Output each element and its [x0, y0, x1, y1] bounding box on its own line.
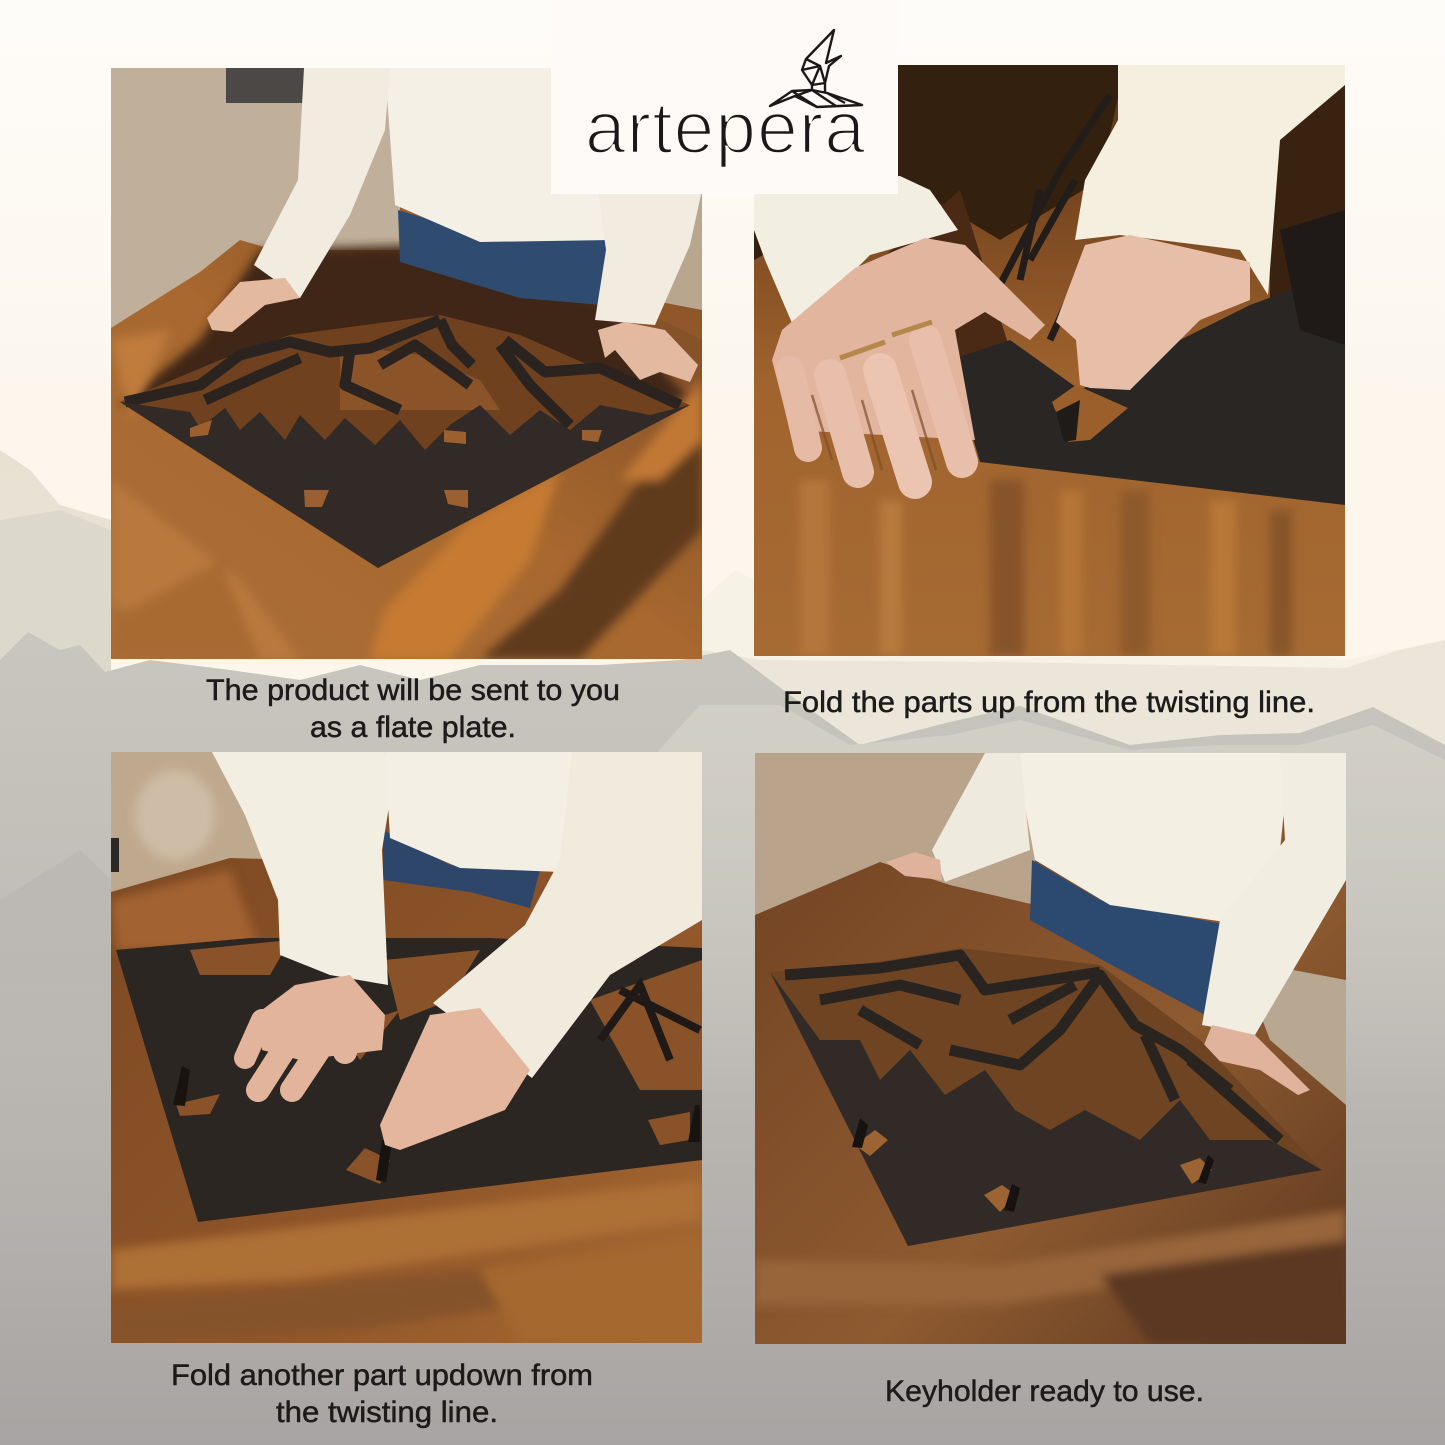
plate cutouts — [176, 940, 702, 1184]
folded tabs — [855, 1130, 1212, 1212]
caption: step 4: Keyholder ready to use. — [885, 1375, 1204, 1408]
photo panel: flat plate on the table — [111, 68, 702, 659]
right sleeve — [1075, 65, 1345, 295]
left sleeve — [754, 176, 958, 330]
table surface — [111, 240, 702, 387]
right sleeve — [433, 752, 702, 1078]
jeans — [398, 210, 610, 305]
right hand on plate — [380, 1008, 530, 1150]
caption: step 3: the twisting line. — [276, 1396, 498, 1429]
hands — [886, 852, 942, 880]
sleeves — [932, 753, 1030, 882]
caption: step 1: as a flate plate. — [310, 711, 516, 744]
cut plate — [770, 948, 1322, 1246]
floor — [111, 68, 400, 330]
logo wordmark: artepera — [585, 88, 865, 169]
caption: step 2: Fold the parts up from the twisting line. — [783, 686, 1315, 719]
jeans — [1030, 860, 1228, 1015]
wood grain — [800, 480, 1292, 656]
mountain strokes — [1000, 95, 1110, 340]
tab cutouts — [190, 420, 602, 508]
left hand on plate — [245, 975, 385, 1090]
left hand — [772, 238, 1045, 482]
sweater body — [385, 752, 590, 872]
sweater body — [1015, 753, 1290, 922]
photo panel: keyholder ready to use — [755, 753, 1346, 1344]
caption: step 3: Fold another part updown from — [171, 1359, 593, 1392]
wood grain — [111, 330, 702, 659]
dark wood behind plate — [120, 245, 690, 405]
logo panel — [551, 0, 898, 194]
photo panel: folding another part — [111, 752, 702, 1343]
sweater body and sleeves — [385, 68, 612, 242]
floor — [755, 753, 1035, 915]
wood cutout — [1052, 385, 1128, 442]
caption: step 1: The product will be sent to you — [206, 674, 620, 707]
rings — [840, 322, 932, 358]
wood grain — [755, 1210, 1346, 1344]
left sleeve — [212, 752, 390, 985]
black plate — [116, 938, 702, 1222]
dark wall strip — [226, 68, 305, 103]
logo icon: geometric bird — [770, 30, 862, 107]
floor — [111, 752, 262, 892]
hands — [207, 278, 300, 332]
right hand — [1056, 235, 1250, 390]
photo panel: folding the parts up — [754, 65, 1345, 656]
black plate — [960, 290, 1345, 505]
jeans — [383, 830, 540, 908]
wood grain — [111, 870, 702, 1343]
cut plate — [120, 315, 690, 568]
